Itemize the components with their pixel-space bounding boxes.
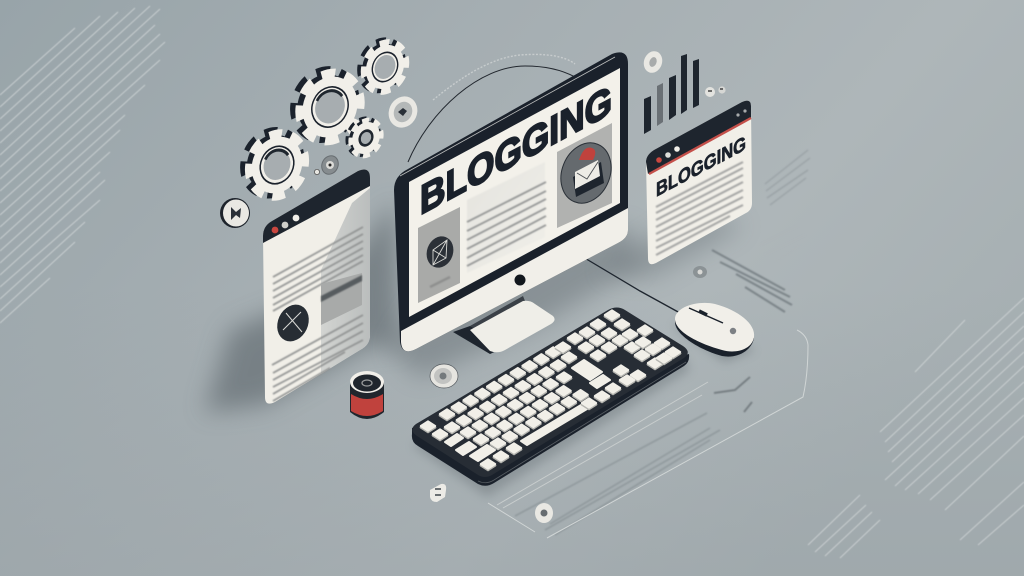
right image block with envelope [552,123,620,228]
icon: small gear [342,114,387,161]
icon: monitor stand [453,296,555,354]
main key rows [421,342,588,449]
outline lines below keyboard [488,330,808,538]
panel: monitor [394,52,628,351]
panel: keyboard [412,308,689,486]
icon: disc above bars [641,49,665,75]
window title bar [646,101,751,174]
icon: X circle [271,299,315,347]
icon: middle gear [284,61,371,151]
window title bar [263,170,370,243]
text lines [272,227,363,401]
right key block [568,310,680,369]
decorative arcs [408,66,575,162]
heading: BLOGGING: BLOGGING [420,76,612,224]
article block [467,162,546,273]
icon: disc left of keyboard [430,364,458,388]
hatch: top-left diagonal lines [0,6,165,323]
panel: right document window [646,101,752,264]
mouse pad streaks [712,250,792,312]
monitor frame [394,52,628,351]
bottom keys [481,383,620,470]
cable [583,257,680,313]
icon: large lower gear [234,122,315,206]
image block [321,273,362,325]
heading: BLOGGING: BLOGGING [656,131,746,202]
bar chart [644,54,699,134]
icon: disc below keyboard [535,503,553,523]
icon: mouse [675,303,754,357]
arrow keys [614,365,645,386]
icon: small badge lower-left [430,484,446,502]
monitor chin [401,208,628,351]
icon: red cylinder [350,371,384,419]
panel: left document window [263,170,370,404]
left image block [418,207,460,303]
desk shadows [205,200,755,497]
monitor screen [409,68,620,317]
power dot [514,274,526,286]
wide keys [445,360,610,461]
icon: small discs [314,153,341,177]
icon: small smileys [705,86,726,97]
icon: disc beside gears [384,92,422,132]
icon: disc near mouse [693,266,707,278]
icon: top gear [352,34,414,98]
hatch: bottom-right diagonal lines [808,298,1024,558]
keyboard base [412,354,689,486]
gears cluster [220,34,422,228]
faint notes: right of monitor [760,150,810,262]
icon: play disc [220,198,250,228]
text lines [656,162,743,255]
shaded right side of document [321,188,370,374]
